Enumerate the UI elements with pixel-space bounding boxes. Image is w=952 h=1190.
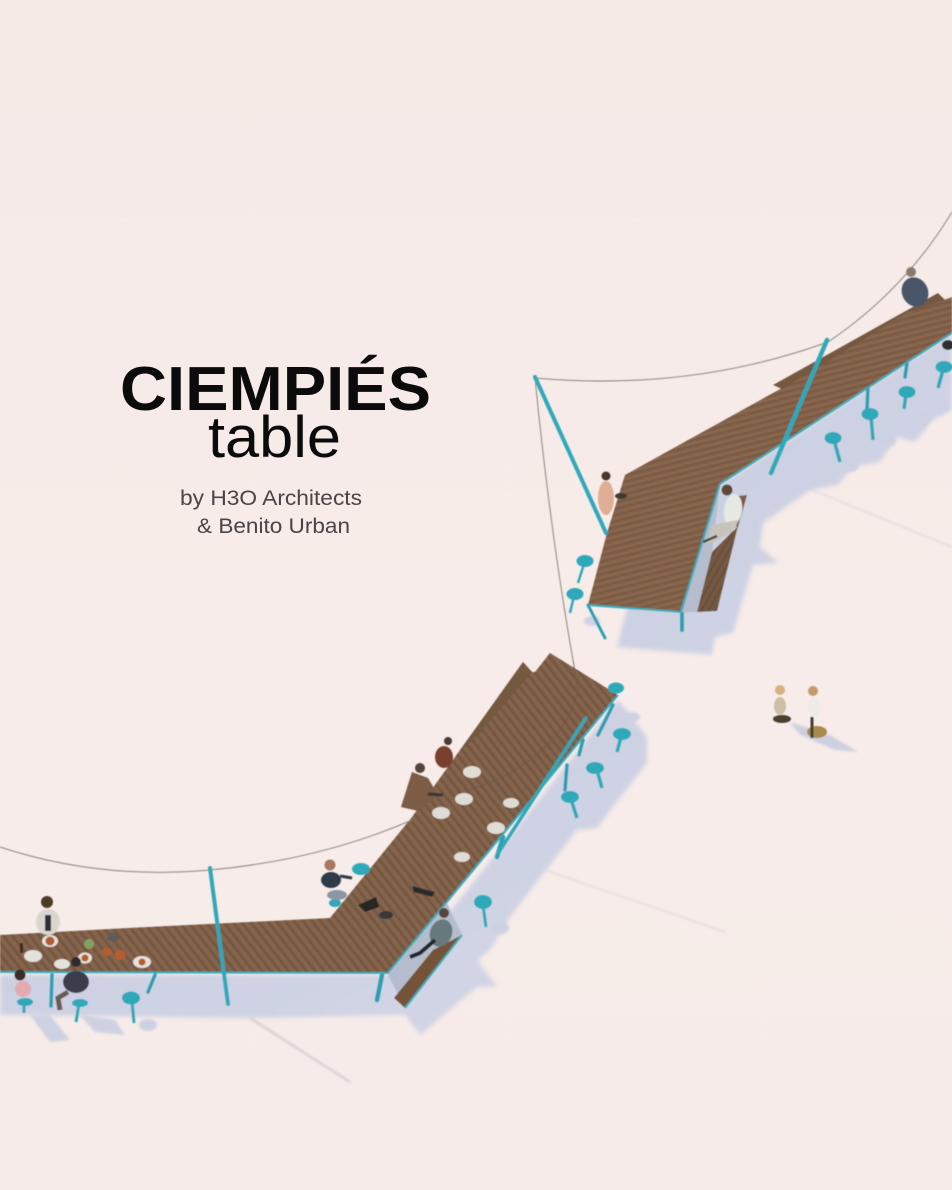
person: woman at left xyxy=(598,472,627,515)
child left xyxy=(773,685,791,723)
lower tabletop xyxy=(0,653,618,973)
upper table legs xyxy=(588,363,907,638)
lower side strip xyxy=(459,662,532,752)
person: woman with laptop side xyxy=(321,860,352,900)
lower table section xyxy=(0,653,647,1042)
credits text: & Benito Urban xyxy=(197,515,350,538)
credits text xyxy=(180,487,362,538)
title: CIEMPIÉS table xyxy=(120,355,431,470)
title: CIEMPIÉS table: CIEMPIÉS xyxy=(120,355,431,424)
upper stools xyxy=(566,361,952,613)
person: man at top right xyxy=(897,267,933,311)
upper tabletop xyxy=(588,297,952,612)
upper ropes xyxy=(535,212,952,660)
person: child in pink xyxy=(14,970,31,997)
children on tricycles xyxy=(773,685,858,752)
plates and food on horizontal table xyxy=(20,932,151,969)
lower stools xyxy=(17,682,631,1023)
upper table section xyxy=(535,212,952,660)
upper masts xyxy=(535,340,827,533)
upper underside under seat xyxy=(680,483,720,612)
lower table edge xyxy=(0,695,618,973)
upper side strip xyxy=(773,293,945,389)
person: man at table head xyxy=(36,896,60,935)
ground guide lines xyxy=(250,489,952,1082)
plates on diagonal table xyxy=(432,766,519,862)
lower stool and people shadows xyxy=(30,712,640,1042)
person: man in brown top xyxy=(435,737,453,768)
lower table legs xyxy=(51,705,613,1006)
person: man in dark top xyxy=(58,957,89,1010)
upper table shadow xyxy=(617,333,952,655)
children shadow xyxy=(790,722,858,752)
lower table shadow xyxy=(0,700,647,1035)
person: seated man xyxy=(703,484,744,544)
lower ropes xyxy=(0,660,578,872)
lower masts and brace xyxy=(210,718,586,1004)
person: seated in tan robe xyxy=(401,763,443,811)
person: man in grey top xyxy=(410,908,456,957)
credits text: by H3O Architects xyxy=(180,487,362,510)
lower bench xyxy=(388,903,462,1008)
title: CIEMPIÉS table: table xyxy=(208,405,341,470)
person: right edge xyxy=(942,340,952,350)
child right xyxy=(807,686,827,738)
laptop and tablet xyxy=(358,886,435,919)
upper table edge xyxy=(588,333,952,612)
upper stool shadows xyxy=(584,412,931,626)
upper bench xyxy=(697,495,747,612)
